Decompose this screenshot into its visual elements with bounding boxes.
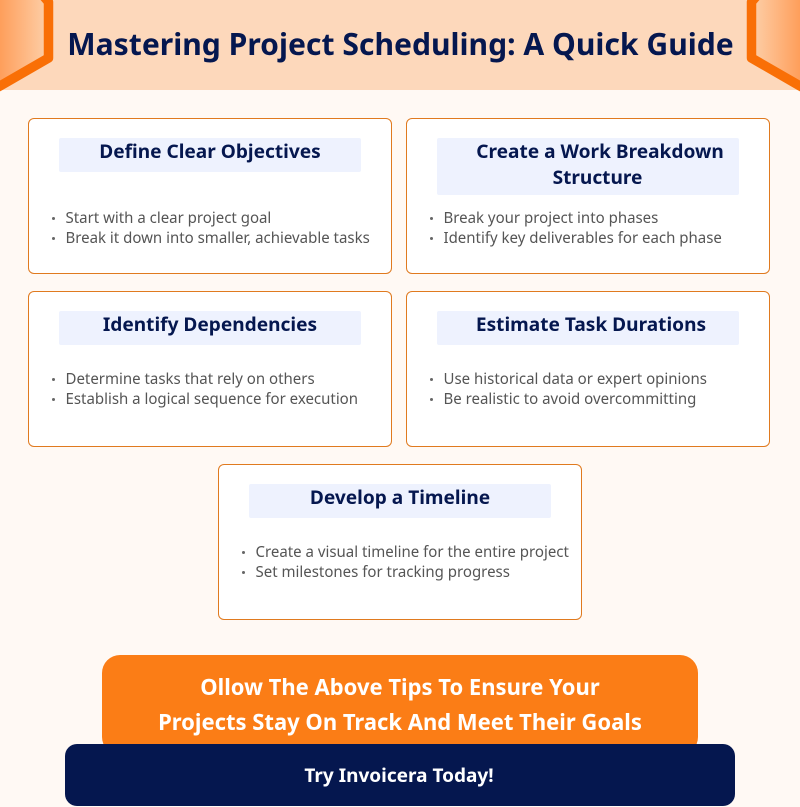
panel: estimate task durations [406, 291, 770, 447]
callout: closing message [102, 655, 698, 755]
heading [249, 484, 551, 518]
button: call to action: Try Invoicera Today! [304, 762, 494, 788]
bullet list: Be realistic to avoid overcommitting [444, 389, 696, 409]
heading [59, 311, 361, 345]
heading [437, 138, 739, 195]
heading [437, 311, 739, 345]
heading: Define Clear Objectives [99, 138, 321, 164]
bullet list: Break your project into phases [444, 208, 658, 228]
callout: closing message: Projects Stay On Track And Meet Their Goals [158, 707, 642, 737]
header band [0, 0, 800, 90]
bullet list [52, 208, 370, 248]
heading: Estimate Task Durations [476, 311, 706, 337]
heading [59, 138, 361, 172]
heading: Develop a Timeline [310, 484, 490, 510]
bullet list [242, 542, 569, 582]
panel: identify dependencies [28, 291, 392, 447]
button: call to action [65, 744, 735, 806]
icon: right hexagon ornament [746, 0, 800, 92]
bullet list [430, 369, 707, 409]
panel: define clear objectives [28, 118, 392, 274]
bullet list: Use historical data or expert opinions [444, 369, 707, 389]
bullet list: Determine tasks that rely on others [66, 369, 315, 389]
bullet list [430, 208, 722, 248]
bullet list: Identify key deliverables for each phase [444, 228, 722, 248]
icon: left hexagon ornament [0, 0, 54, 92]
bullet list: Set milestones for tracking progress [256, 562, 510, 582]
panel: develop a timeline [218, 464, 582, 620]
bullet list: Create a visual timeline for the entire project [256, 542, 569, 562]
panel: work breakdown structure [406, 118, 770, 274]
heading: Create a Work Breakdown [476, 138, 724, 164]
bullet list: Break it down into smaller, achievable tasks [66, 228, 370, 248]
heading: Structure [553, 164, 642, 190]
bullet list: Start with a clear project goal [66, 208, 271, 228]
bullet list [52, 369, 358, 409]
title: Mastering Project Scheduling: A Quick Guide [67, 23, 734, 64]
bullet list: Establish a logical sequence for execution [66, 389, 358, 409]
callout: closing message: Ollow The Above Tips To Ensure Your [200, 672, 600, 702]
heading: Identify Dependencies [103, 311, 317, 337]
